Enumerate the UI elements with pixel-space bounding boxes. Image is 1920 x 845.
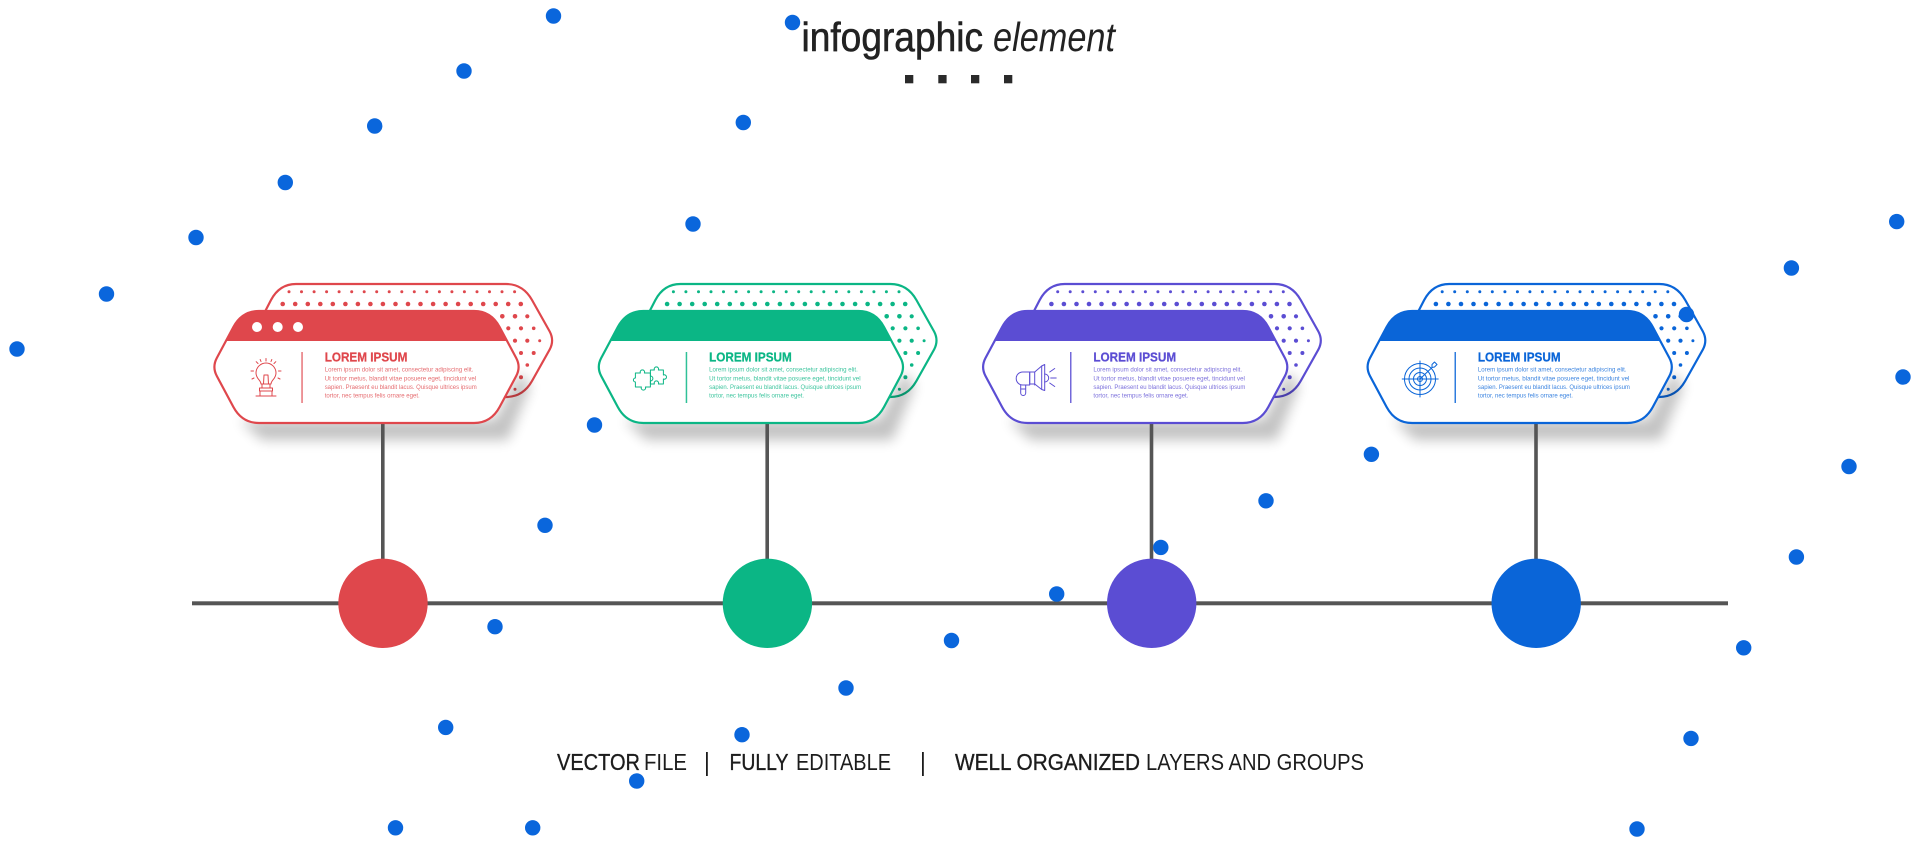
footer caption: EDITABLE: [796, 749, 891, 775]
divider: [301, 352, 303, 403]
step body text: tortor, nec tempus felis ornare eget.: [709, 393, 804, 400]
back hexagon with dots: [1021, 284, 1321, 397]
footer caption: VECTOR: [557, 749, 640, 775]
card shadow: [240, 372, 530, 440]
stem: [1534, 423, 1538, 559]
footer caption: FILE: [644, 749, 687, 775]
step body text: Lorem ipsum dolor sit amet, consectetur adipiscing elit.: [1093, 367, 1242, 374]
footer caption: WELL ORGANIZED: [955, 749, 1140, 775]
step body text: tortor, nec tempus felis ornare eget.: [1478, 393, 1573, 400]
node circle: [723, 559, 812, 648]
step body text: sapien. Praesent eu blandit lacus. Quisque ultrices ipsum: [325, 384, 477, 391]
card shadow: [1009, 372, 1299, 440]
step body text: Lorem ipsum dolor sit amet, consectetur adipiscing elit.: [1478, 367, 1627, 374]
front hexagon: [599, 311, 903, 423]
back hexagon with dots: [637, 284, 936, 397]
step body text: tortor, nec tempus felis ornare eget.: [325, 393, 420, 400]
step body text: Ut tortor metus, blandit vitae posuere eget, tincidunt vel: [709, 375, 861, 382]
back hexagon with dots: [1406, 284, 1705, 397]
footer caption: LAYERS AND GROUPS: [1146, 749, 1364, 775]
step body text: sapien. Praesent eu blandit lacus. Quisque ultrices ipsum: [1093, 384, 1246, 391]
back hexagon with dots: [252, 284, 552, 397]
step body text: tortor, nec tempus felis ornare eget.: [1093, 393, 1189, 400]
step body text: sapien. Praesent eu blandit lacus. Quisque ultrices ipsum: [1478, 384, 1630, 391]
header band: [610, 311, 892, 341]
icon: light bulb: [251, 358, 281, 396]
icon: puzzle: [633, 367, 667, 390]
title: [802, 14, 1116, 60]
step body text: [1478, 367, 1630, 400]
step body text: Ut tortor metus, blandit vitae posuere eget, tincidunt vel: [325, 375, 477, 382]
divider: [1070, 352, 1072, 403]
footer caption: FULLY: [730, 749, 788, 775]
title: infographic: [802, 14, 983, 60]
front hexagon: [983, 311, 1287, 423]
step body text: [1093, 367, 1246, 400]
step body text: [325, 367, 477, 400]
node circle: [338, 559, 428, 648]
stem: [1150, 423, 1153, 559]
divider: [686, 352, 687, 403]
icon: target: [1402, 361, 1438, 397]
card shadow: [624, 372, 914, 440]
step heading: LOREM IPSUM: [1478, 350, 1561, 364]
header window dots: [252, 322, 303, 332]
title squares: [905, 75, 1012, 83]
footer caption: [557, 749, 1364, 776]
header band: [1379, 311, 1660, 341]
title: element: [993, 14, 1116, 60]
header band: [995, 311, 1276, 341]
front hexagon: [1368, 311, 1672, 423]
timeline line: [192, 601, 1728, 605]
icon: megaphone: [1016, 364, 1056, 396]
node circle: [1492, 559, 1581, 648]
step body text: Lorem ipsum dolor sit amet, consectetur adipiscing elit.: [709, 367, 858, 374]
header band: [226, 311, 507, 341]
stem: [381, 423, 385, 559]
step heading: LOREM IPSUM: [709, 350, 792, 364]
panel: step 1 red: [214, 284, 552, 648]
step body text: sapien. Praesent eu blandit lacus. Quisque ultrices ipsum: [709, 384, 861, 391]
node circle: [1107, 559, 1196, 648]
step body text: Ut tortor metus, blandit vitae posuere eget, tincidunt vel: [1478, 375, 1630, 382]
step heading: LOREM IPSUM: [325, 350, 407, 364]
stem: [765, 423, 769, 559]
card shadow: [1393, 372, 1683, 440]
divider: [1454, 352, 1456, 403]
step body text: [709, 367, 861, 400]
front hexagon: [214, 311, 519, 423]
panel: step 4 blue: [1368, 284, 1705, 648]
panel: step 3 purple: [983, 284, 1321, 648]
step body text: Lorem ipsum dolor sit amet, consectetur adipiscing elit.: [325, 367, 474, 374]
step heading: LOREM IPSUM: [1093, 350, 1176, 364]
step body text: Ut tortor metus, blandit vitae posuere eget, tincidunt vel: [1093, 375, 1245, 382]
panel: step 2 green: [599, 284, 936, 648]
